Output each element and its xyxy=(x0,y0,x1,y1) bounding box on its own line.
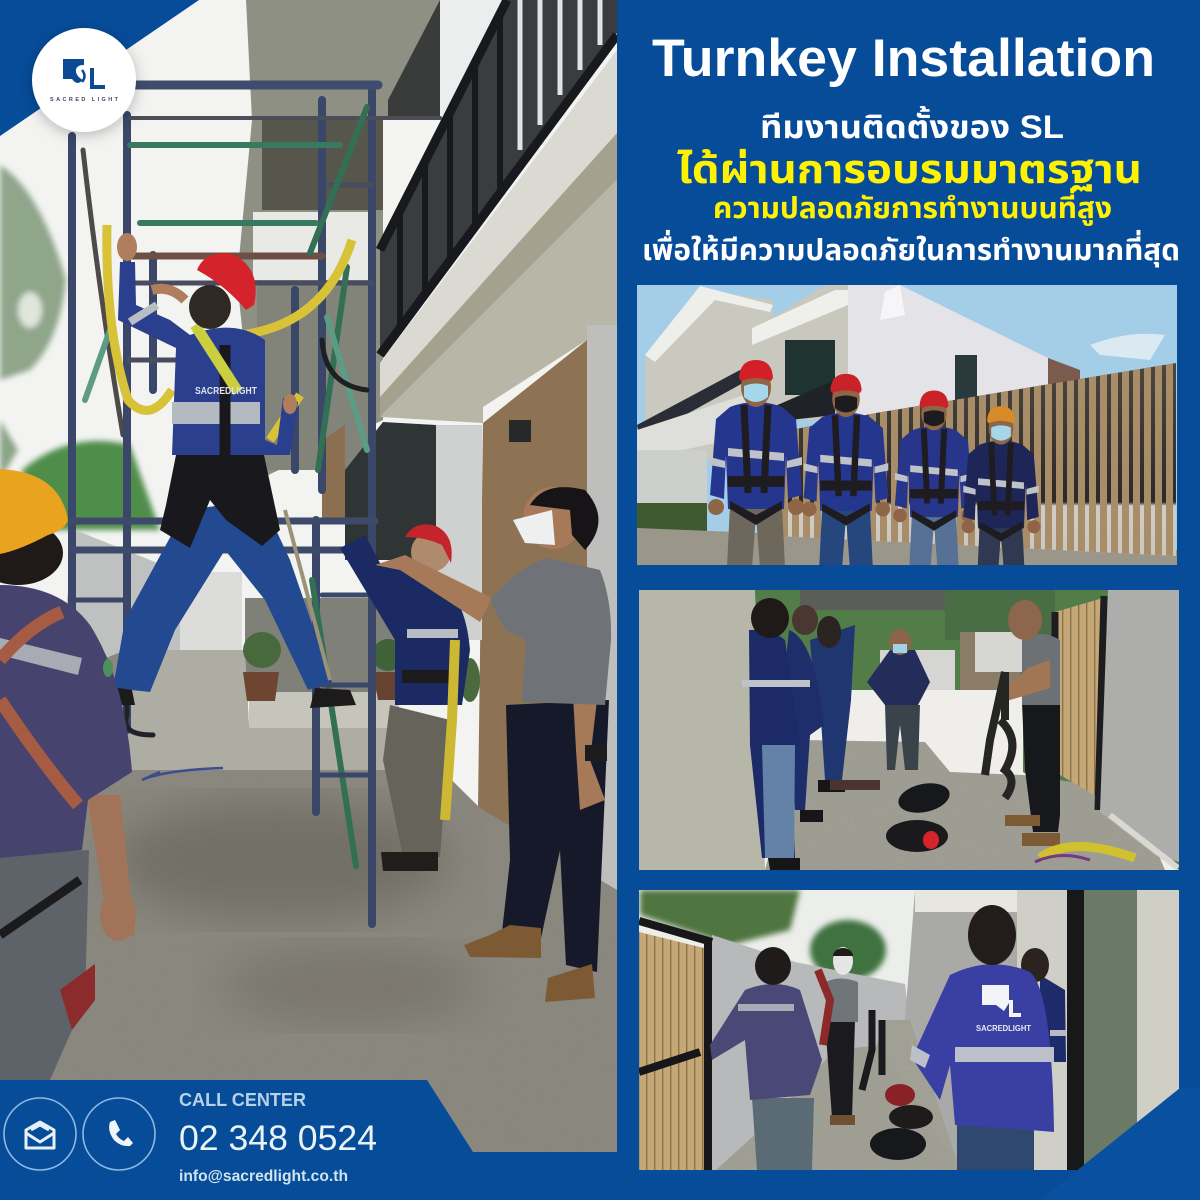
icon: phone circle xyxy=(83,1098,155,1170)
instructor in gray t-shirt xyxy=(375,487,611,1002)
scaffold xyxy=(72,85,440,924)
side wall, wood cladding and window xyxy=(322,325,617,890)
decorative blue corner triangle xyxy=(1040,1088,1200,1200)
phone number: 02 348 0524 xyxy=(179,1118,377,1158)
title: Turnkey Installation xyxy=(652,29,1155,88)
contact ribbon xyxy=(0,1080,617,1200)
icon: envelope circle xyxy=(4,1098,76,1170)
call center label: CALL CENTER xyxy=(179,1090,306,1110)
top-left blue corner xyxy=(0,0,199,136)
potted plants xyxy=(243,632,480,702)
instructor with red harness xyxy=(818,947,882,1125)
middle worker in red helmet xyxy=(340,524,470,871)
upper building soffit and wall xyxy=(239,0,440,475)
safety lanyards xyxy=(107,225,352,440)
email: info@sacredlight.co.th xyxy=(179,1168,348,1185)
photo: four workers in front of building xyxy=(637,285,1177,577)
back view worker xyxy=(710,947,822,1170)
walkway walls and steps xyxy=(60,530,395,694)
gear bags xyxy=(870,1084,933,1160)
worker with logo on shirt: SACREDLIGHT xyxy=(976,1023,1032,1033)
logo badge xyxy=(32,28,136,132)
instructor with harness xyxy=(995,600,1060,846)
climbing worker xyxy=(110,233,356,708)
main photo: worker on scaffold xyxy=(0,0,617,1152)
gear bags and straps xyxy=(830,779,1135,862)
photo: workers with gear in alley xyxy=(639,890,1179,1170)
worker with logo on shirt xyxy=(910,905,1054,1170)
thai heading line 1: ทีมงานติดตั้งของ SL xyxy=(760,105,1064,145)
standing worker xyxy=(867,629,930,770)
student group xyxy=(742,598,855,870)
balcony railing xyxy=(380,0,617,355)
thai heading line 3: ความปลอดภัยการทำงานบนที่สูง xyxy=(713,187,1112,226)
thai heading line 4: เพื่อให้มีความปลอดภัยในการทำงานมากที่สุด xyxy=(642,229,1180,267)
foreground worker in yellow helmet xyxy=(0,469,136,1080)
thai heading line 2: ได้ผ่านการอบรมมาตรฐาน xyxy=(677,147,1142,192)
balcony underside xyxy=(380,50,617,423)
hanging harness xyxy=(985,672,1012,798)
trees xyxy=(0,165,160,530)
concrete ground xyxy=(0,650,617,1152)
logo badge: SACRED LIGHT xyxy=(50,97,119,103)
photo: training on the ground xyxy=(639,590,1179,870)
climbing worker: SACREDLIGHT xyxy=(195,386,257,397)
side worker xyxy=(1021,948,1066,1062)
